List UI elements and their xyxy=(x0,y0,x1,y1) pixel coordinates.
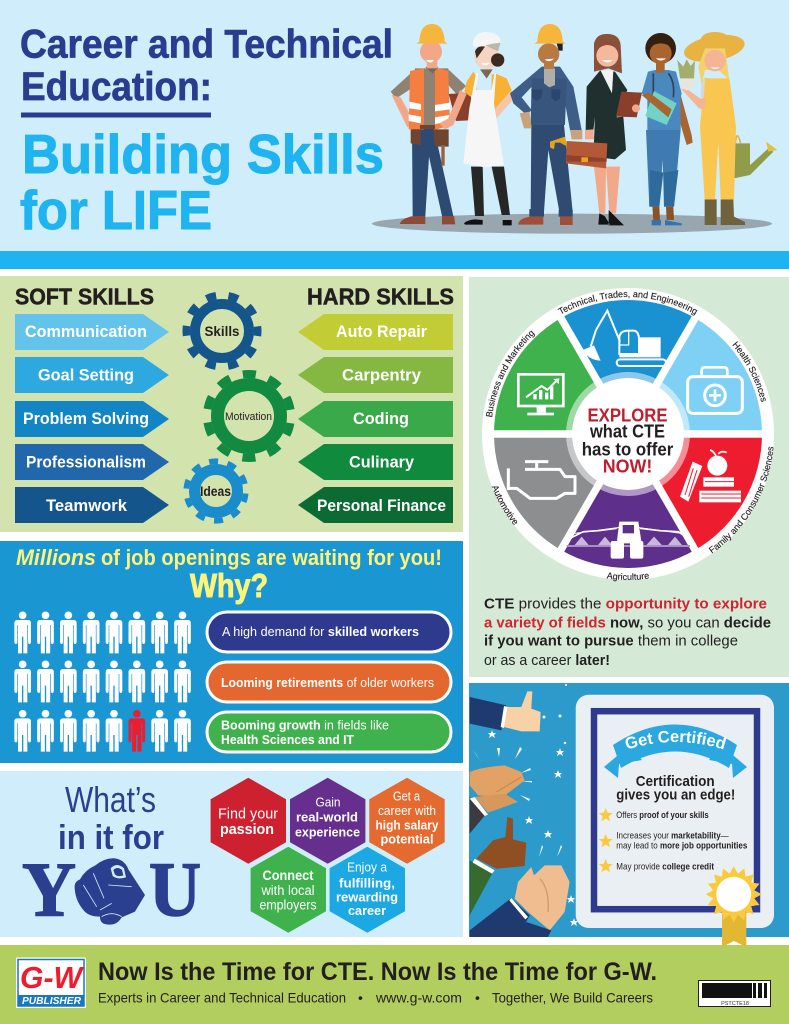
wheel labels xyxy=(486,290,774,582)
footer band xyxy=(0,945,789,1024)
hexagon: fulfilling rewarding career xyxy=(330,847,405,933)
wheel center text: has to offer xyxy=(582,439,673,460)
hexagon: fulfilling rewarding career: fulfilling, xyxy=(339,875,395,890)
soft skill arrows: Teamwork xyxy=(46,496,128,515)
wheel labels: Health Sciences xyxy=(732,341,766,402)
hexagon: high salary potential: high salary xyxy=(376,818,439,832)
footer details: • xyxy=(358,989,363,1005)
title: Building Skills for LIFE xyxy=(20,123,384,241)
heading: why: Why? xyxy=(190,567,268,604)
sector: technical, trades, engineering xyxy=(561,300,695,434)
explore description xyxy=(484,596,771,669)
explore description: a variety of fields now, so you can decide xyxy=(484,615,771,631)
wheel labels: Automotive xyxy=(492,486,518,525)
soft skill arrows: Professionalism xyxy=(26,452,146,472)
hard skill arrows: Coding xyxy=(353,409,409,428)
worker: businesswoman with briefcase xyxy=(566,34,642,225)
worker: mechanic xyxy=(510,24,582,225)
bullet list with stars: May provide college credit xyxy=(616,861,714,871)
bullet list with stars: Offers proof of your skills xyxy=(616,810,709,820)
tagline: Now Is the Time for CTE. Now Is the Time for G-W. xyxy=(98,958,657,986)
explore description: if you want to pursue them in college xyxy=(484,634,738,650)
hexagon: connect with local employers: employers xyxy=(260,897,317,912)
logo: G-W Publisher: PUBLISHER xyxy=(22,995,81,1007)
worker: nurse xyxy=(642,33,693,225)
wheel center text: EXPLORE xyxy=(588,405,668,426)
panel: get certified xyxy=(469,683,789,947)
icon: engine xyxy=(508,462,575,498)
hexagon: real-world experience xyxy=(290,778,365,864)
pill: skilled workers xyxy=(207,612,451,652)
pill: booming growth: Booming growth in fields like xyxy=(221,718,389,732)
title: Career and Technical Education: Career and Technical xyxy=(20,22,393,66)
pill: booming growth: Health Sciences and IT xyxy=(221,732,354,747)
bullet list with stars: may lead to more job opportunities xyxy=(616,841,747,851)
hands: lower clapping pair xyxy=(470,865,570,937)
heading: hard skills: HARD SKILLS xyxy=(307,284,454,310)
hard skill arrows: Auto Repair xyxy=(336,322,427,341)
icon: excavator xyxy=(583,311,666,366)
wheel icons xyxy=(508,311,742,559)
hard skill arrows: Carpentry xyxy=(342,366,422,384)
header panel xyxy=(0,0,789,269)
heading: YOU with pointing hand: U xyxy=(149,846,201,932)
hexagon: connect with local employers: with local xyxy=(261,883,314,898)
icon: monitor with chart xyxy=(518,374,563,415)
heading: what's in it for: in it for xyxy=(58,819,164,857)
logo: G-W Publisher xyxy=(16,958,86,1008)
wheel center text xyxy=(582,405,673,477)
explore description: or as a career later! xyxy=(484,653,610,669)
explore description: CTE provides the opportunity to explore xyxy=(484,596,767,612)
gear: skills xyxy=(186,295,258,367)
certificate card xyxy=(576,694,774,947)
footer details xyxy=(98,989,653,1005)
bullet list with stars xyxy=(599,808,747,872)
title: Career and Technical Education xyxy=(20,22,393,118)
soft skill arrows: Communication xyxy=(25,322,147,341)
hands: upper clapping pair xyxy=(470,765,525,834)
gear: motivation xyxy=(196,363,302,469)
footer details: www.g-w.com xyxy=(375,989,462,1005)
certificate heading: Certification xyxy=(636,773,715,790)
footer details: Experts in Career and Technical Education xyxy=(98,989,346,1005)
hexagon: real-world experience: Gain xyxy=(316,796,341,810)
heading: soft skills: SOFT SKILLS xyxy=(15,284,154,310)
soft skill arrows: Problem Solving xyxy=(23,409,149,428)
gear: skills: Skills xyxy=(204,324,240,339)
panel: soft and hard skills xyxy=(0,276,463,532)
ribbon: get certified: Get Certified xyxy=(626,730,726,750)
heading: YOU with pointing hand xyxy=(22,846,201,932)
hand: upper thumbs up xyxy=(470,691,541,731)
hexagon: find your passion: passion xyxy=(220,821,274,838)
hexagon: high salary potential xyxy=(369,778,445,864)
hands: thumbs up and clapping xyxy=(470,691,570,937)
sector: business and marketing xyxy=(494,318,628,434)
certificate heading xyxy=(616,773,735,804)
worker: farmer with watering can xyxy=(677,31,777,225)
hexagon: fulfilling rewarding career: career xyxy=(348,903,386,918)
wheel labels: Business and Marketing xyxy=(486,330,536,417)
icon: apple and books xyxy=(680,450,741,502)
hexagon: connect with local employers xyxy=(251,847,326,933)
sector: agriculture xyxy=(561,434,695,568)
panel: what's in it for you xyxy=(0,771,463,937)
gear: motivation: Motivation xyxy=(225,411,272,423)
hand: brown thumbs up xyxy=(470,817,526,915)
hexagon: high salary potential: Get a xyxy=(393,790,420,804)
icon: pointing hand xyxy=(75,858,145,925)
illustration: six workers xyxy=(372,24,777,234)
certificate heading: gives you an edge! xyxy=(616,787,735,804)
title: Building Skills for LIFE: for LIFE xyxy=(20,179,212,241)
pill: skilled workers: A high demand for skilled workers xyxy=(222,624,419,639)
icon: sprayer tractor xyxy=(567,522,690,559)
wheel labels: Agriculture xyxy=(606,572,649,582)
heading: what's in it for xyxy=(58,779,164,857)
gear: ideas xyxy=(180,455,252,527)
pill: looming retirements: Looming retirements of older workers xyxy=(221,675,434,690)
gear: ideas: Ideas xyxy=(200,484,231,499)
footer details: Together, We Build Careers xyxy=(492,989,653,1005)
hard skill arrows xyxy=(298,314,453,523)
wheel center text: what CTE xyxy=(589,421,665,442)
bullet list with stars: Increases your marketability— xyxy=(616,831,729,841)
icon: medical kit xyxy=(688,367,742,413)
hexagon: real-world experience: experience xyxy=(295,826,360,840)
wheel: career clusters xyxy=(482,288,774,582)
seal with ribbon xyxy=(706,866,762,947)
hard skill arrows: Culinary xyxy=(349,452,415,472)
ribbon: get certified xyxy=(604,724,747,778)
hard skill arrows: Personal Finance xyxy=(317,496,446,515)
pill: booming growth xyxy=(207,712,451,752)
worker: chef xyxy=(463,32,513,225)
title: Building Skills for LIFE: Building Skills xyxy=(22,123,384,185)
hexagon: fulfilling rewarding career: rewarding xyxy=(336,890,398,905)
barcode: PSTCTE18 xyxy=(721,1001,749,1007)
footer details: • xyxy=(475,989,480,1005)
title: Career and Technical Education: Education: xyxy=(21,65,212,109)
barcode xyxy=(698,980,770,1007)
heading: millions of job openings: of job openings are waiting for you! xyxy=(101,545,442,570)
wheel center text: NOW! xyxy=(603,456,652,477)
wheel labels: Technical, Trades, and Engineering xyxy=(558,290,698,316)
worker: construction xyxy=(391,24,476,224)
pictogram: workers grid xyxy=(14,611,191,752)
hexagon: high salary potential: career with xyxy=(378,804,436,818)
hexagon: find your passion: Find your xyxy=(218,805,278,822)
sector: health sciences xyxy=(628,318,762,434)
soft skill arrows: Goal Setting xyxy=(38,366,134,384)
pill: looming retirements xyxy=(207,662,451,702)
sparkles xyxy=(473,684,578,926)
sector: family and consumer sciences xyxy=(628,434,762,550)
panel: explore CTE xyxy=(469,277,789,677)
heading: millions of job openings: Millions xyxy=(16,545,96,570)
sector: automotive xyxy=(494,434,628,550)
logo: G-W Publisher: G-W xyxy=(20,960,85,995)
wheel labels: Family and Consumer Sciences xyxy=(708,446,774,554)
soft skill arrows xyxy=(15,314,169,523)
heading: what's in it for: What’s xyxy=(65,779,156,820)
hexagon: real-world experience: real-world xyxy=(296,811,358,825)
heading: YOU with pointing hand: Y xyxy=(22,846,76,932)
hexagon: high salary potential: potential xyxy=(380,832,434,846)
hexagon: connect with local employers: Connect xyxy=(262,868,314,883)
hexagon: find your passion xyxy=(211,778,286,864)
panel: job openings xyxy=(0,541,463,763)
hexagon: fulfilling rewarding career: Enjoy a xyxy=(347,860,388,875)
